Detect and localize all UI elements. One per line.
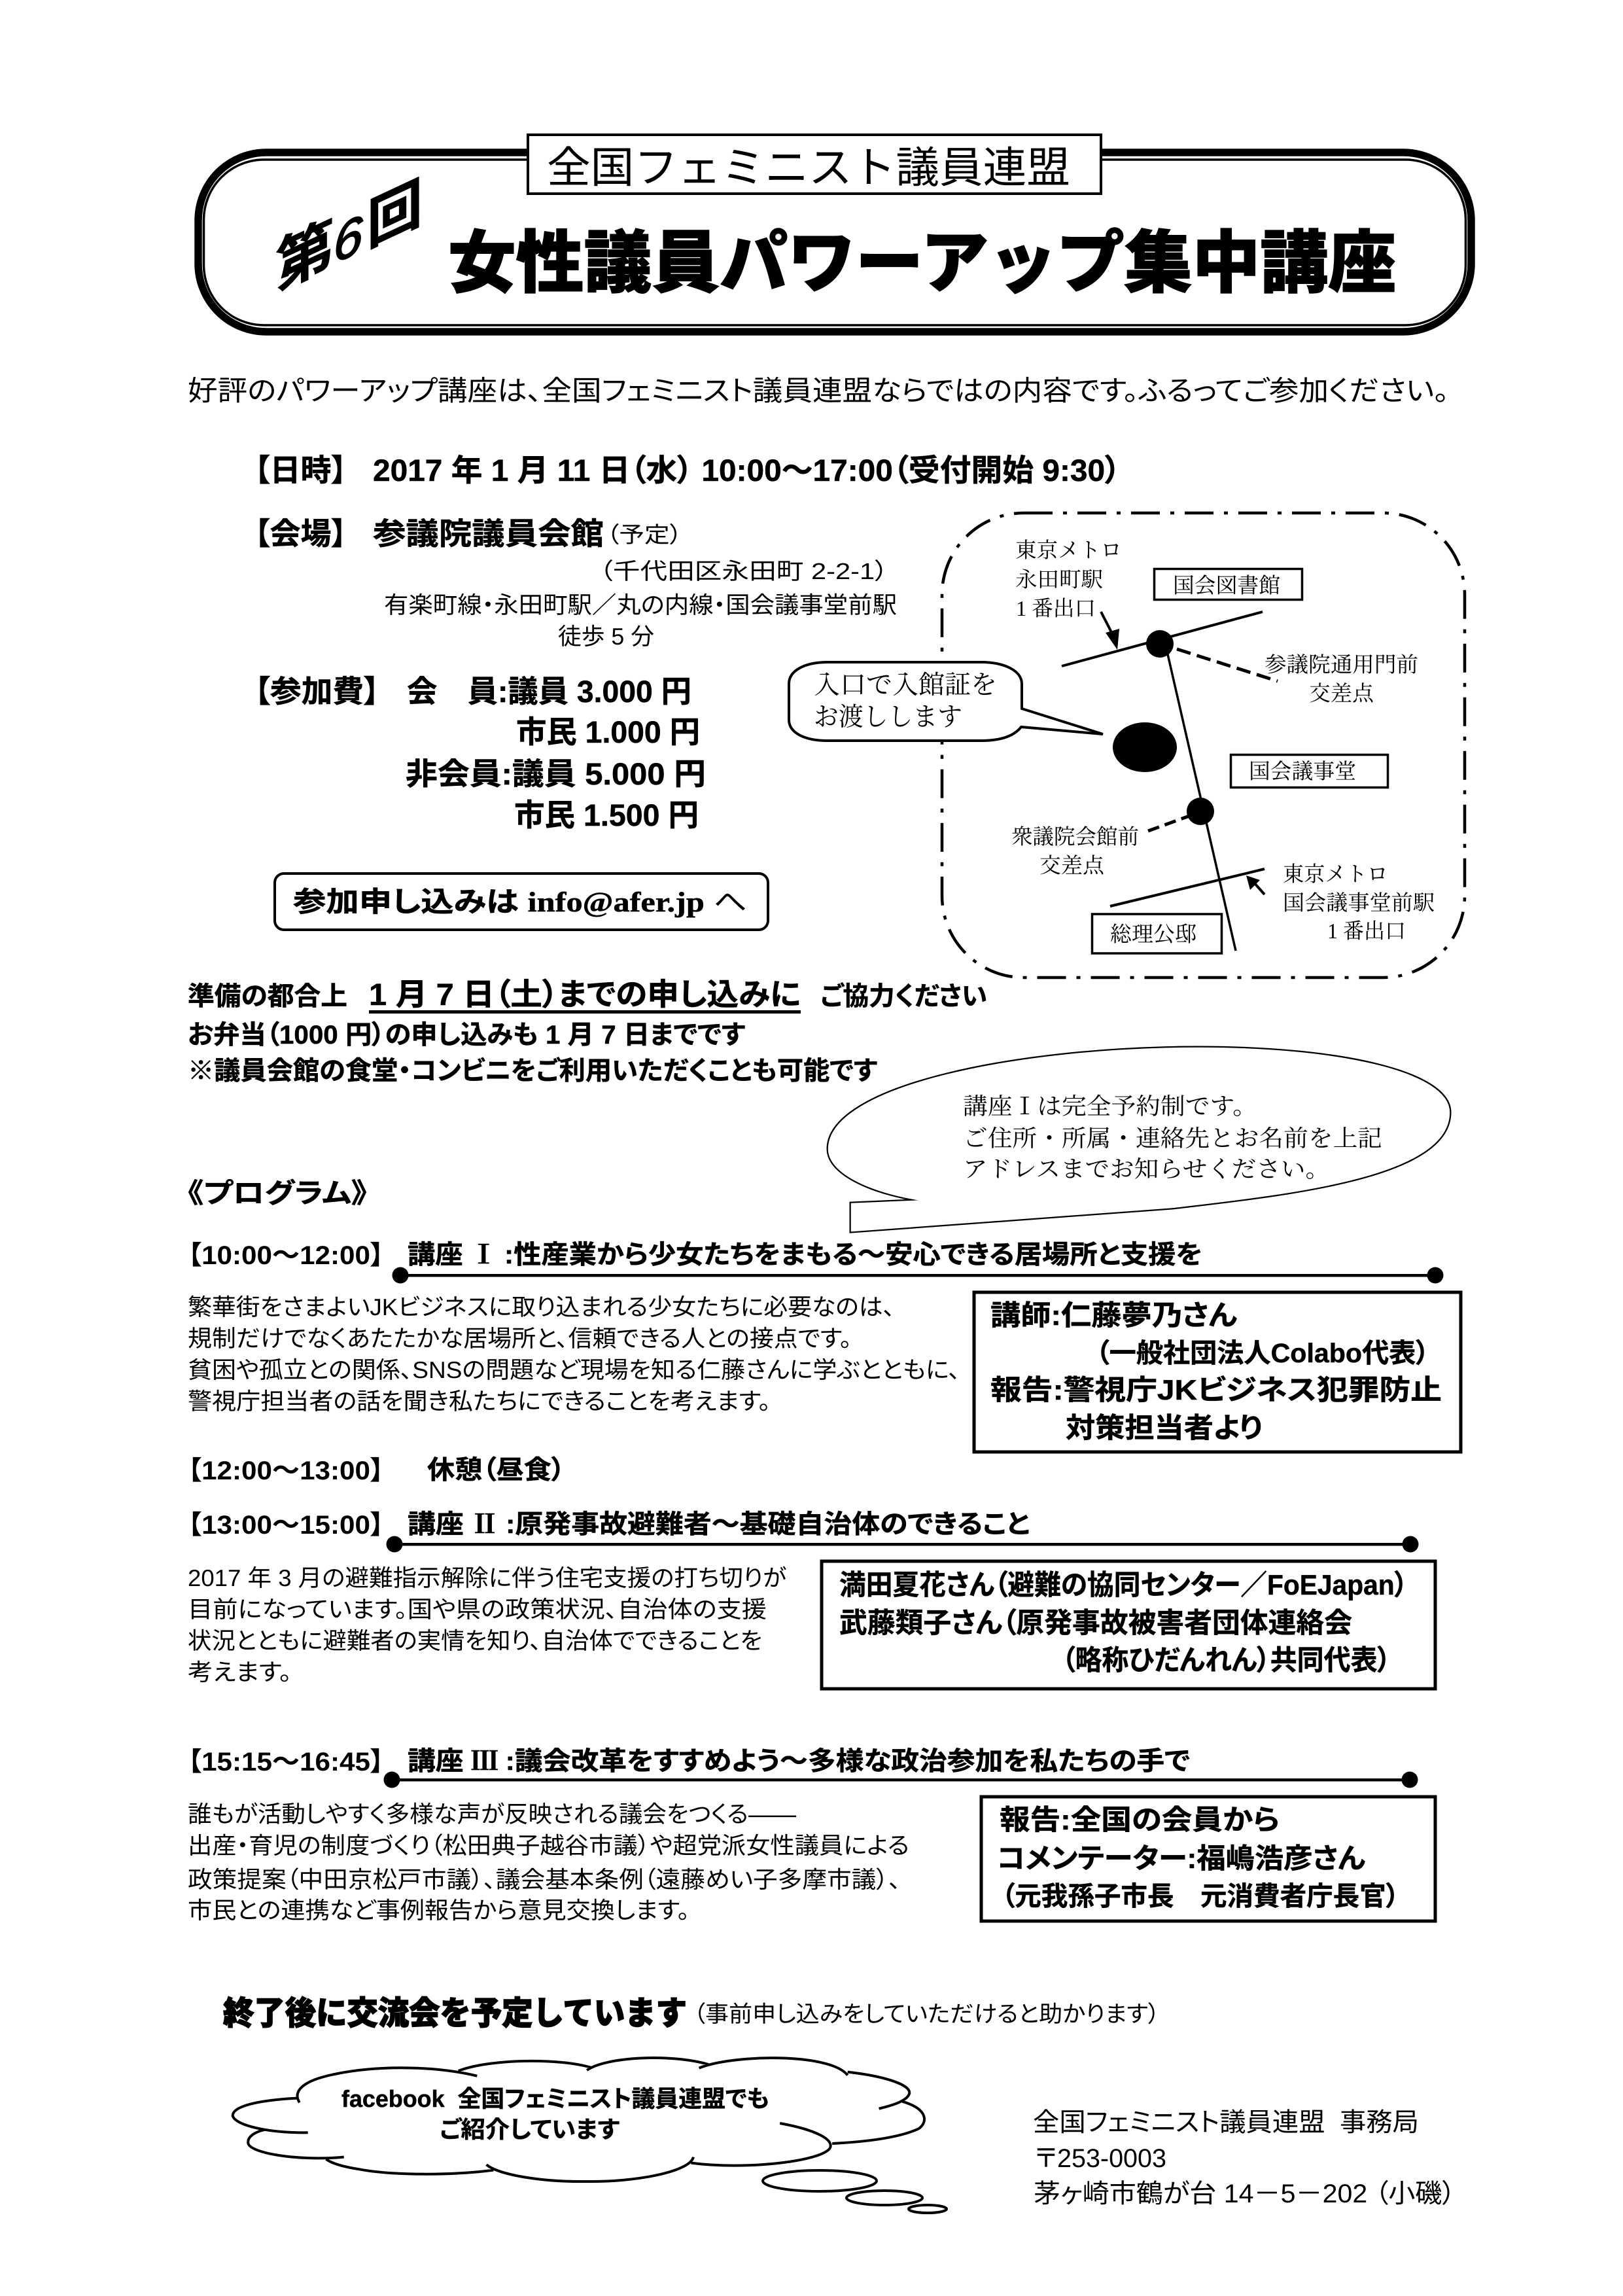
cloud outline xyxy=(233,2058,924,2181)
map label: lower house crossing xyxy=(1011,826,1139,878)
speech bubble: reservation note xyxy=(829,1048,1449,1231)
deadline notice: お弁当（1000 円）の申し込みも 1 月 7 日までです xyxy=(188,1021,745,1050)
edition mark: 6th: 6 xyxy=(334,203,363,275)
title banner xyxy=(198,135,1471,332)
secretariat contact: 全国フェミニスト議員連盟 事務局 xyxy=(1033,2108,1419,2137)
icon: venue marker xyxy=(1113,722,1177,772)
session 2 speaker box: 武藤類子さん（原発事故被害者団体連絡会 xyxy=(839,1608,1352,1639)
program heading: 《プログラム》 xyxy=(188,1178,367,1209)
social gathering notice: 終了後に交流会を予定しています xyxy=(223,1995,687,2032)
lunch break: 【12:00～13:00】 xyxy=(188,1457,384,1485)
participation fees: 市民 1.000 円 xyxy=(516,715,700,749)
venue details: 【会場】 xyxy=(254,516,347,551)
map label: Nagatacho station exit xyxy=(1015,539,1122,621)
session 3 speaker box: 報告:全国の会員から xyxy=(1000,1805,1280,1836)
map box: National Diet Library xyxy=(1154,569,1302,599)
session 3 speaker box: コメンテーター:福嶋浩彦さん xyxy=(997,1843,1365,1875)
session 2 rule xyxy=(386,1536,1418,1552)
map label: Kokkai-gijidomae station exit: 東京メトロ xyxy=(1283,863,1388,887)
session 2 heading: 講座 Ⅱ :原発事故避難者～基礎自治体のできること xyxy=(408,1504,1030,1541)
session 3 heading: 講座 Ⅲ :議会改革をすすめよう～多様な政治参加を私たちの手で xyxy=(408,1740,1190,1778)
session 2 description: 状況とともに避難者の実情を知り、自治体でできることを xyxy=(188,1627,762,1654)
speech bubble: reservation note: ご住所・所属・連絡先とお名前を上記 xyxy=(963,1125,1382,1152)
session 1 speaker box: 報告:警視庁JKビジネス犯罪防止 xyxy=(990,1375,1442,1406)
map box: National Diet Library: 国会図書館 xyxy=(1173,574,1280,598)
session 1 description xyxy=(188,1294,960,1415)
map label: Kokkai-gijidomae station exit: 国会議事堂前駅 xyxy=(1283,892,1435,915)
edition mark: 6th xyxy=(275,169,423,303)
cloud tail bubbles xyxy=(763,2170,947,2213)
map label: Kokkai-gijidomae station exit: 1 番出口 xyxy=(1327,920,1406,944)
intro sentence: 好評のパワーアップ講座は、全国フェミニスト議員連盟ならではの内容です。ふるってご参加ください。 xyxy=(188,376,1449,407)
lunch break xyxy=(188,1456,565,1485)
session 2 speaker box xyxy=(822,1561,1435,1689)
deadline notice: ご協力ください xyxy=(820,982,987,1011)
session 1 heading: 講座 Ⅰ :性産業から少女たちをまもる～安心できる居場所と支援を xyxy=(408,1234,1202,1271)
arrow: to Nagatacho exit xyxy=(1101,612,1119,650)
session 3 description: 出産・育児の制度づくり（松田典子越谷市議）や超党派女性議員による xyxy=(188,1832,909,1859)
map box: Prime Minister residence xyxy=(1092,914,1222,953)
edition mark: 6th: 第 xyxy=(275,210,334,303)
thought cloud: facebook note xyxy=(233,2058,947,2213)
session 2 description: 2017 年 3 月の避難指示解除に伴う住宅支援の打ち切りが xyxy=(188,1564,787,1591)
session 2 xyxy=(188,1504,1435,1689)
map label: Nagatacho station exit: 東京メトロ xyxy=(1015,539,1122,563)
venue details: 徒歩 5 分 xyxy=(558,623,654,650)
participation fees: 市民 1.500 円 xyxy=(514,798,699,832)
session 3 speaker box xyxy=(981,1797,1435,1921)
map label: lower house crossing: 衆議院会館前 xyxy=(1011,826,1139,849)
event date: 2017 年 1 月 11 日（水） 10:00～17:00（受付開始 9:30） xyxy=(373,453,1121,487)
social gathering notice: （事前申し込みをしていただけると助かります） xyxy=(693,2002,1160,2027)
map label: Nagatacho station exit: 1 番出口 xyxy=(1016,597,1096,621)
secretariat contact xyxy=(1033,2108,1456,2208)
session 3 description: 誰もが活動しやすく多様な声が反映される議会をつくる―― xyxy=(188,1801,796,1828)
thought cloud: facebook note: ご紹介しています xyxy=(440,2116,620,2143)
venue details: （千代田区永田町 2-2-1） xyxy=(599,559,888,584)
secretariat contact: 茅ヶ崎市鶴が台 14－5－202 （小磯） xyxy=(1034,2180,1456,2208)
map box: National Diet Building xyxy=(1231,755,1388,788)
session 3 speaker box: （元我孫子市長 元消費者庁長官） xyxy=(1002,1881,1399,1911)
session 1 speaker box: （一般社団法人Colabo代表） xyxy=(1096,1338,1429,1368)
edition mark: 6th: 回 xyxy=(367,171,423,259)
icon: south intersection marker xyxy=(1187,798,1214,825)
callout: pass at entrance: お渡しします xyxy=(814,702,962,732)
callout: pass at entrance: 入口で入館証を xyxy=(814,670,997,699)
session 2 heading: 【13:00～15:00】 xyxy=(188,1511,384,1540)
secretariat contact: 〒253-0003 xyxy=(1035,2144,1166,2173)
session 2 speaker box: 満田夏花さん（避難の協同センター／FoEJapan） xyxy=(839,1570,1408,1601)
participation fees: 非会員:議員 5.000 円 xyxy=(406,756,706,791)
session 2 description: 目前になっています。国や県の政策状況、自治体の支援 xyxy=(188,1596,767,1623)
deadline notice xyxy=(188,977,987,1086)
session 2 description xyxy=(188,1564,787,1686)
participation fees xyxy=(254,674,706,832)
thought cloud: facebook note: facebook 全国フェミニスト議員連盟でも xyxy=(341,2085,769,2112)
map label: lower house crossing: 交差点 xyxy=(1039,855,1105,878)
session 1 xyxy=(188,1234,1461,1452)
map box: National Diet Building: 国会議事堂 xyxy=(1249,760,1356,784)
venue details: 参議院議員会館 xyxy=(373,516,604,551)
session 3 xyxy=(188,1740,1435,1924)
application email box: 参加申し込みは info@afer.jp へ xyxy=(293,887,747,918)
session 1 description: 警視庁担当者の話を聞き私たちにできることを考えます。 xyxy=(188,1388,771,1415)
icon: north intersection marker xyxy=(1146,630,1174,658)
venue details xyxy=(254,516,897,650)
venue access map xyxy=(789,513,1465,978)
session 2 description: 考えます。 xyxy=(188,1659,292,1686)
session 1 speaker box xyxy=(974,1292,1461,1452)
session 3 description xyxy=(188,1801,909,1924)
participation fees: 会 員:議員 3.000 円 xyxy=(407,674,691,709)
event date: 【日時】 xyxy=(254,453,347,487)
session 2 heading xyxy=(188,1504,1030,1541)
map label: Nagatacho station exit: 永田町駅 xyxy=(1015,569,1103,592)
session 3 description: 政策提案（中田京松戸市議）、議会基本条例（遠藤めい子多摩市議）、 xyxy=(188,1866,901,1893)
application email box xyxy=(275,874,768,930)
venue details: （予定） xyxy=(606,523,682,548)
map label: upper house gate crossing xyxy=(1265,654,1418,706)
deadline notice: ※議員会館の食堂・コンビニをご利用いただくことも可能です xyxy=(188,1057,877,1086)
session 1 description: 繁華街をさまよいJKビジネスに取り込まれる少女たちに必要なのは、 xyxy=(188,1294,895,1320)
session 1 speaker box: 講師:仁藤夢乃さん xyxy=(990,1300,1237,1332)
session 1 rule xyxy=(393,1267,1443,1284)
deadline notice: 1 月 7 日（土）までの申し込みに xyxy=(369,977,801,1012)
venue details: 有楽町線・永田町駅／丸の内線・国会議事堂前駅 xyxy=(384,592,897,618)
organisation name box: 全国フェミニスト議員連盟 xyxy=(547,143,1070,192)
session 2 speaker box: （略称ひだんれん）共同代表） xyxy=(1062,1645,1391,1676)
speech bubble: reservation note: アドレスまでお知らせください。 xyxy=(963,1156,1330,1182)
callout: pass at entrance xyxy=(789,662,1103,741)
map box: Prime Minister residence: 総理公邸 xyxy=(1110,923,1196,947)
session 3 heading: 【15:15～16:45】 xyxy=(188,1748,384,1776)
arrow: to Kokkai-gijidomae exit xyxy=(1246,875,1265,894)
map label: Kokkai-gijidomae station exit xyxy=(1283,863,1435,944)
map label: upper house gate crossing: 参議院通用門前 xyxy=(1265,654,1418,677)
lunch break: 休憩（昼食） xyxy=(427,1456,565,1485)
social gathering notice xyxy=(223,1995,1160,2032)
map roads xyxy=(1062,612,1278,951)
session 1 description: 貧困や孤立との関係、SNSの問題など現場を知る仁藤さんに学ぶとともに、 xyxy=(188,1356,960,1383)
session 3 rule xyxy=(383,1772,1418,1788)
participation fees: 【参加費】 xyxy=(254,674,379,709)
session 1 speaker box: 対策担当者より xyxy=(1066,1413,1263,1444)
speech bubble: reservation note: 講座Ⅰは完全予約制です。 xyxy=(963,1088,1257,1122)
main title: 女性議員パワーアップ集中講座 xyxy=(448,226,1396,302)
map label: upper house gate crossing: 交差点 xyxy=(1309,682,1374,706)
session 1 heading: 【10:00～12:00】 xyxy=(188,1241,384,1270)
deadline notice: 準備の都合上 xyxy=(188,982,347,1011)
session 1 description: 規制だけでなくあたたかな居場所と、信頼できる人との接点です。 xyxy=(188,1325,852,1352)
session 3 description: 市民との連携など事例報告から意見交換します。 xyxy=(188,1897,689,1924)
